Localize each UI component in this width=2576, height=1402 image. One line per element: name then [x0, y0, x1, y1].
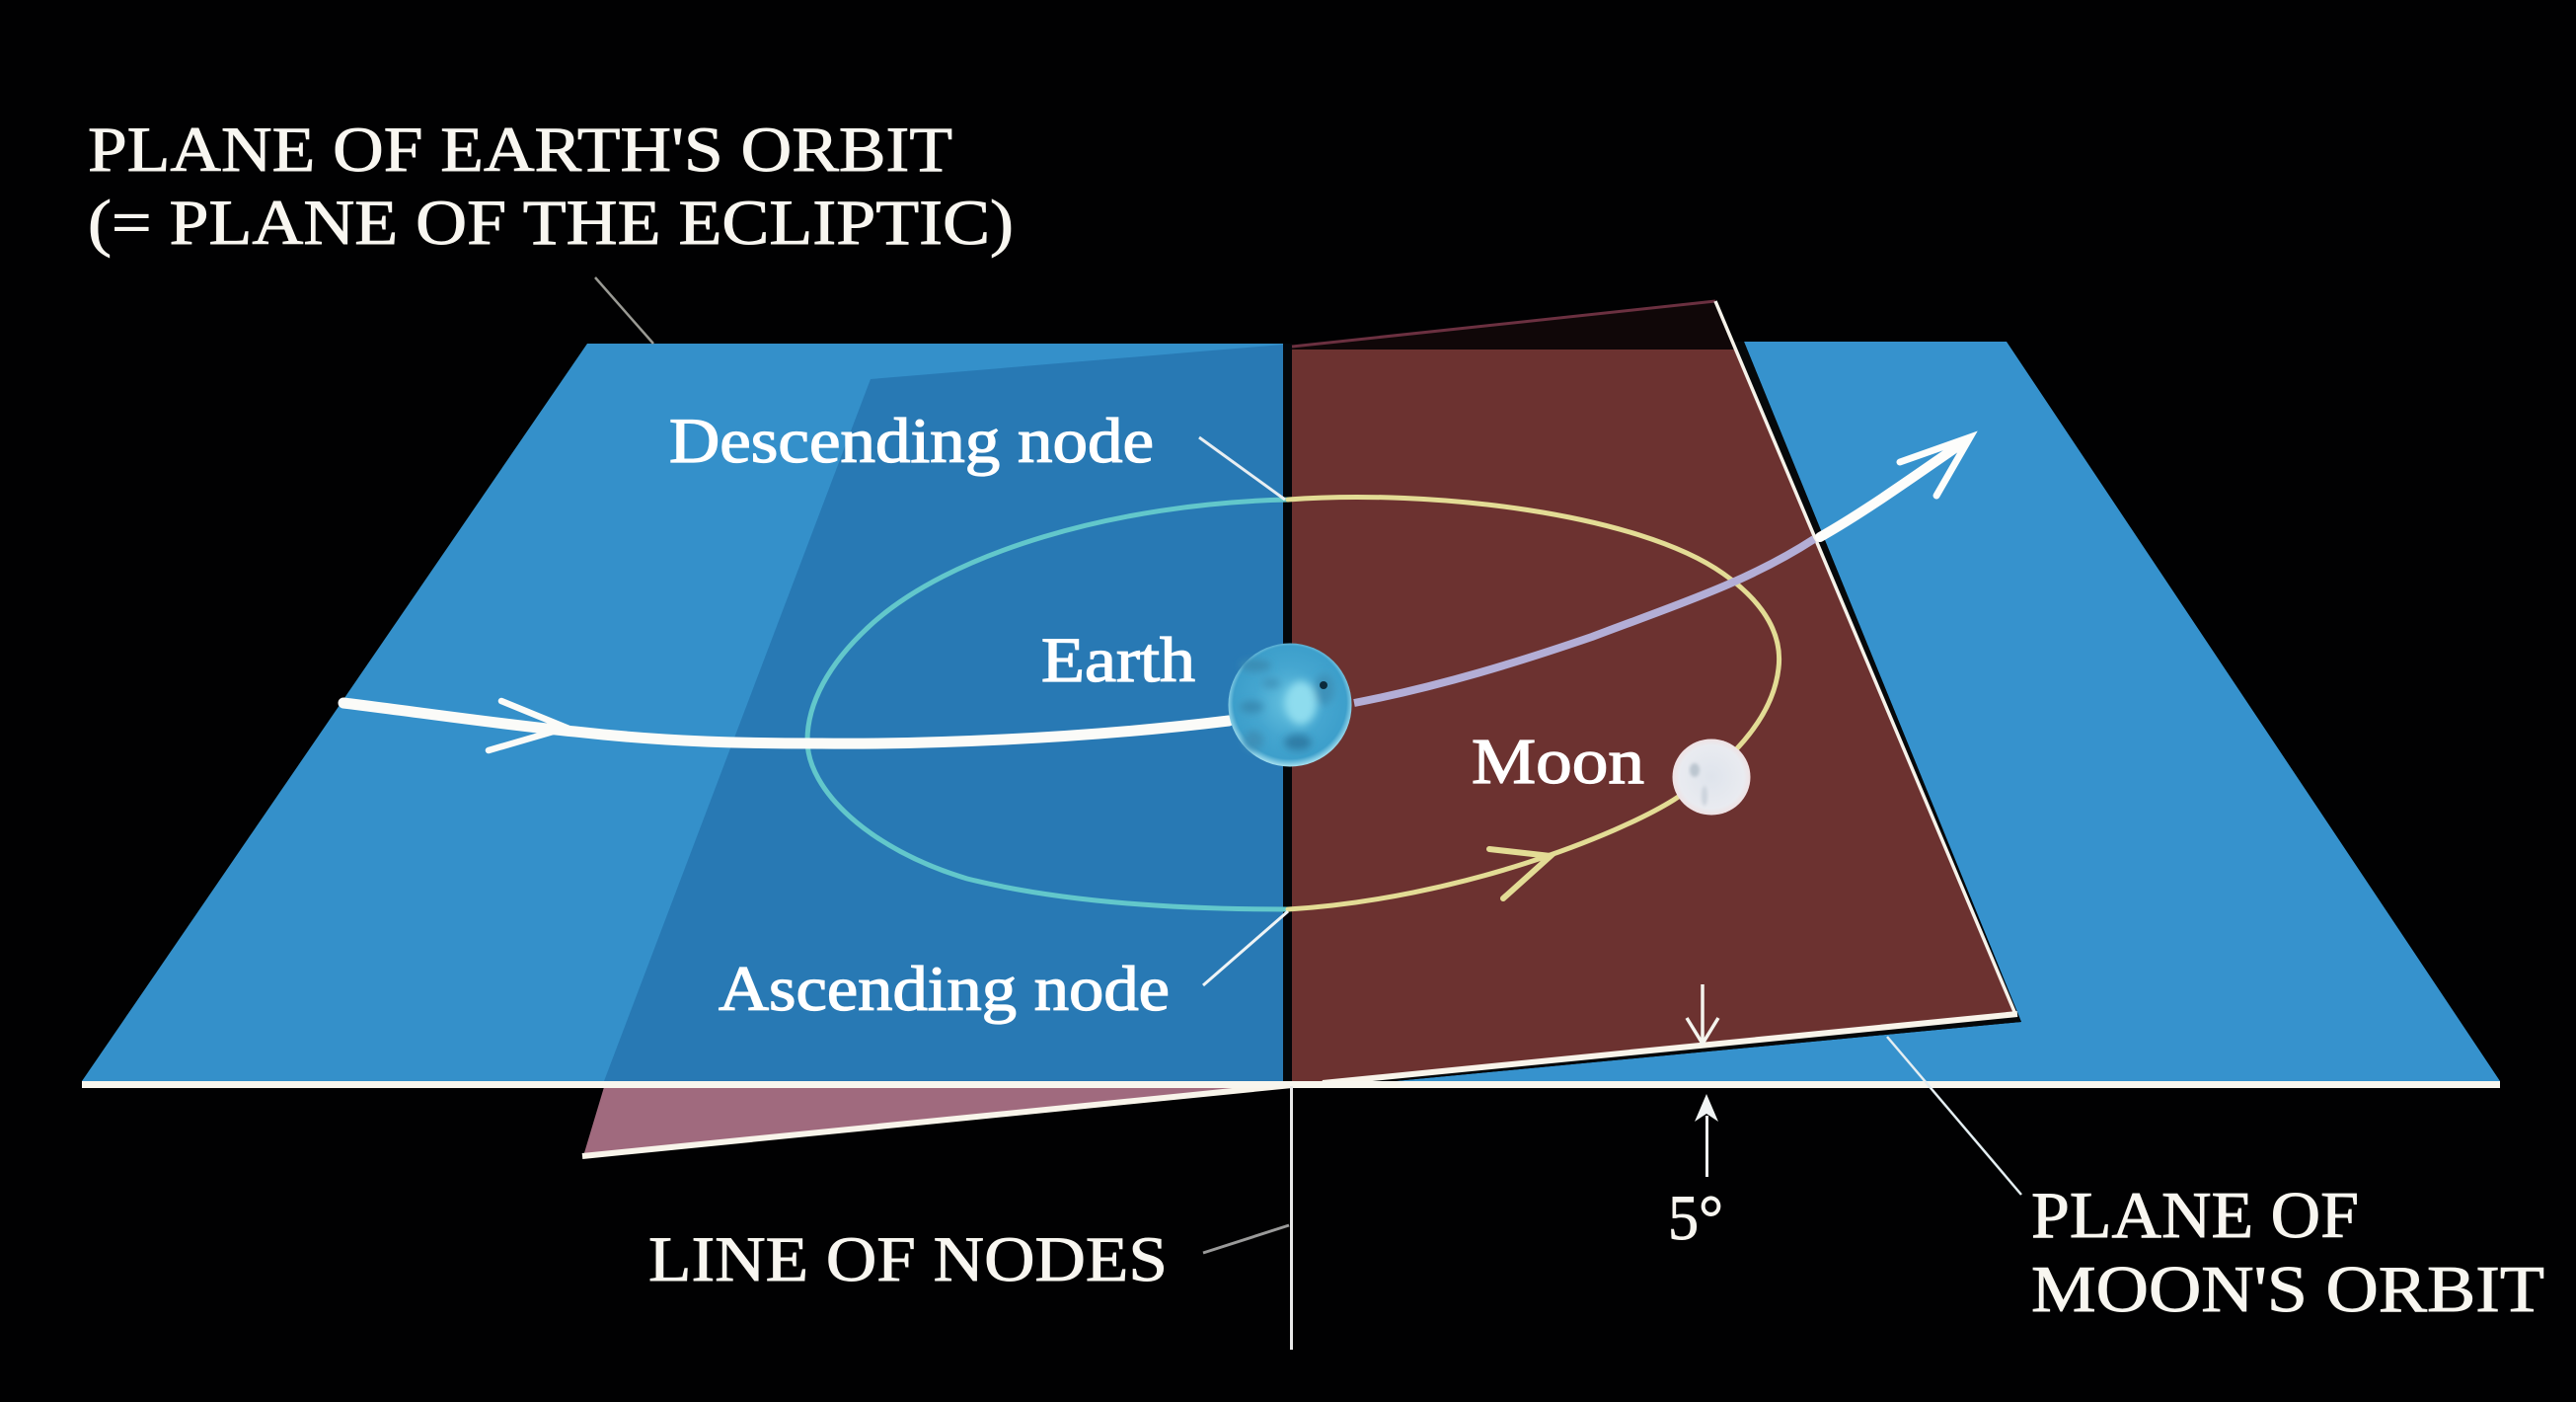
- icon: Moon: [1672, 739, 1751, 816]
- panel: plane of Moon's orbit: [582, 301, 2021, 1156]
- leader: descending node: [1199, 437, 1285, 500]
- heading: plane of Earth's orbit: PLANE OF EARTH'S ORBIT: [88, 115, 952, 186]
- arrow: 5 degree marker, down: [1687, 984, 1718, 1044]
- label: 5 degrees: 5°: [1668, 1183, 1723, 1254]
- divider: black line of nodes above plane: [1283, 344, 1292, 1084]
- label: Ascending node: Ascending node: [719, 954, 1170, 1025]
- leader: line of nodes: [1203, 1225, 1289, 1253]
- heading: plane of Earth's orbit: [88, 115, 1014, 259]
- line: front edge of the ecliptic plane: [82, 1081, 2500, 1088]
- label: plane of Moon's orbit: [2031, 1179, 2544, 1326]
- line of nodes: vertical line: [1290, 1086, 1293, 1350]
- label: Descending node: Descending node: [669, 406, 1154, 477]
- arrow: Moon's orbital direction: [1489, 849, 1551, 898]
- heading: plane of Earth's orbit: (= PLANE OF THE ECLIPTIC): [88, 188, 1014, 259]
- leader: plane of the ecliptic: [595, 277, 653, 344]
- label: Earth: Earth: [1041, 625, 1195, 696]
- panel: plane of Earth's orbit: [82, 342, 2500, 1081]
- arrow: Earth's orbital path outgoing: [1820, 437, 1970, 537]
- icon: Earth: [1228, 644, 1352, 766]
- arrow: Earth's orbital path behind Moon's plane: [1354, 539, 1814, 703]
- label: Line of nodes: LINE OF NODES: [648, 1224, 1168, 1295]
- label: plane of Moon's orbit: PLANE OF: [2031, 1179, 2359, 1252]
- orbit: Moon's orbit, part above ecliptic: [1288, 497, 1780, 909]
- arrow: 5 degree marker, up: [1695, 1094, 1718, 1177]
- leader: plane of Moon's orbit: [1887, 1037, 2021, 1195]
- leader: ascending node: [1203, 911, 1288, 985]
- label: Moon: Moon: [1472, 726, 1644, 798]
- label: plane of Moon's orbit: MOON'S ORBIT: [2031, 1253, 2544, 1326]
- arrow: Earth's orbital path incoming: [343, 701, 1229, 750]
- orbit: Moon's orbit, part below ecliptic: [807, 500, 1288, 909]
